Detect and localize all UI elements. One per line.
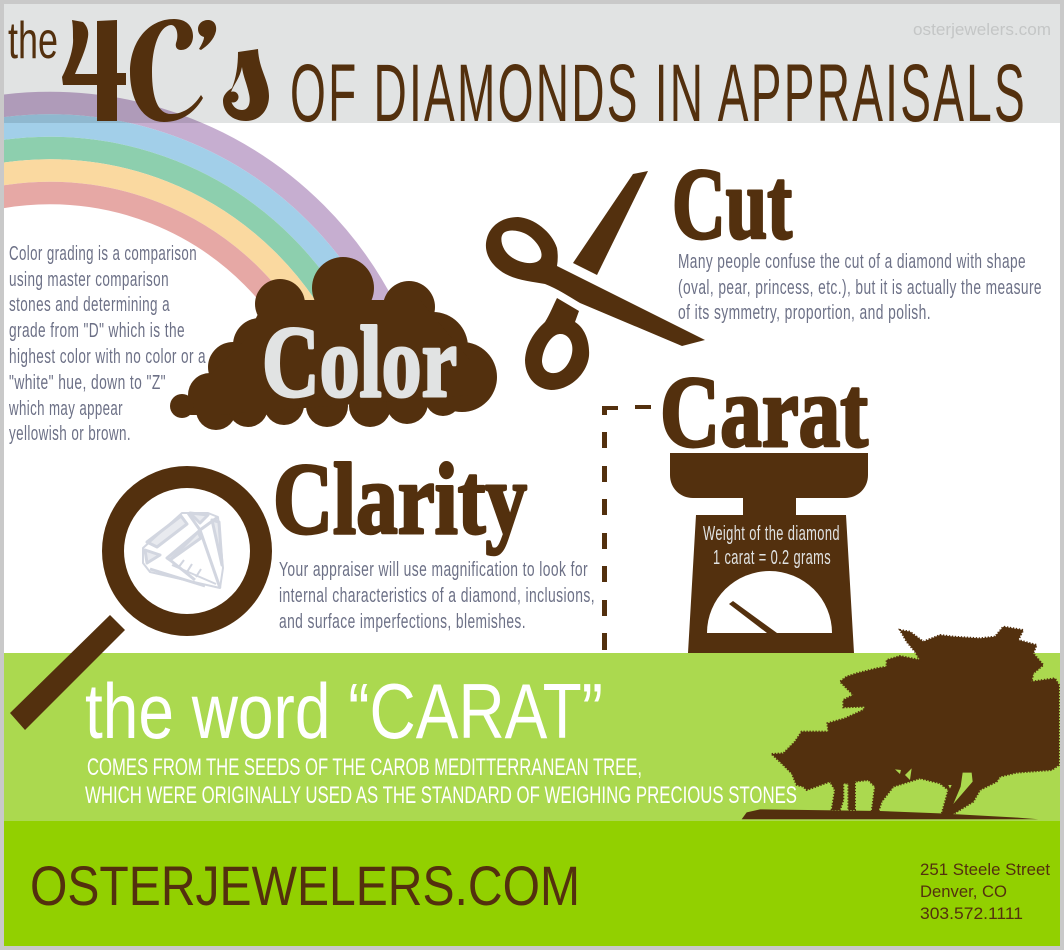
heading: clarity: Clarity xyxy=(273,443,527,556)
heading: the word carat: the word “CARAT” xyxy=(85,667,603,755)
clarity description: Your appraiser will use magnification to look for xyxy=(279,559,588,581)
carat origin text: COMES FROM THE SEEDS OF THE CAROB MEDITTERRANEAN TREE, xyxy=(87,754,642,781)
title word: the: the xyxy=(8,12,58,70)
website label: osterjewelers.com xyxy=(913,20,1051,39)
footer address: 303.572.1111 xyxy=(920,905,1023,923)
color description: stones and determining a xyxy=(9,294,170,316)
panel: cut xyxy=(486,148,1042,390)
footer address xyxy=(920,861,1050,923)
carat origin text xyxy=(85,754,797,809)
color description: highest color with no color or a xyxy=(9,346,206,368)
footer address: Denver, CO xyxy=(920,883,1007,901)
icon: magnifying glass xyxy=(113,477,261,625)
heading: color: Color xyxy=(262,306,457,419)
footer address: 251 Steele Street xyxy=(920,861,1050,879)
icon: scale xyxy=(670,453,868,653)
scale text xyxy=(703,523,840,569)
icon: scissors xyxy=(486,171,705,390)
color description: Color grading is a comparison xyxy=(9,243,197,265)
footer band xyxy=(4,821,1060,946)
scale text: Weight of the diamond xyxy=(703,523,840,545)
magnifier handle xyxy=(10,615,125,730)
footer website: OSTERJEWELERS.COM xyxy=(30,854,580,917)
dashed line xyxy=(602,405,651,650)
color description: "white" hue, down to "Z" xyxy=(9,372,166,394)
cloud xyxy=(170,257,497,430)
heading: cut: Cut xyxy=(672,148,792,261)
heading: carat: Carat xyxy=(660,356,868,469)
panel: color xyxy=(8,243,497,445)
cut description xyxy=(678,251,1042,324)
color description: yellowish or brown. xyxy=(9,423,131,445)
title xyxy=(8,12,1027,139)
icon: carob tree xyxy=(742,627,1059,819)
color description xyxy=(8,243,206,445)
icon: diamond xyxy=(143,513,223,588)
title letter: C xyxy=(130,19,203,122)
header band xyxy=(4,4,1060,123)
clarity description: internal characteristics of a diamond, inclusions, xyxy=(279,585,595,607)
color description: which may appear xyxy=(8,398,123,420)
scale text: 1 carat = 0.2 grams xyxy=(713,547,831,569)
panel: word carat band xyxy=(4,653,1060,821)
color description: grade from "D" which is the xyxy=(9,320,185,342)
rainbow xyxy=(4,92,388,300)
title numeral: 4 xyxy=(62,20,126,121)
title letter: s xyxy=(223,49,269,121)
panel: carat xyxy=(602,356,868,653)
color description: using master comparison xyxy=(9,269,169,291)
clarity description xyxy=(279,559,595,633)
cut description: of its symmetry, proportion, and polish. xyxy=(678,302,931,324)
clarity description: and surface imperfections, blemishes. xyxy=(279,611,526,633)
panel: clarity xyxy=(113,443,595,633)
title apostrophe xyxy=(198,20,216,50)
